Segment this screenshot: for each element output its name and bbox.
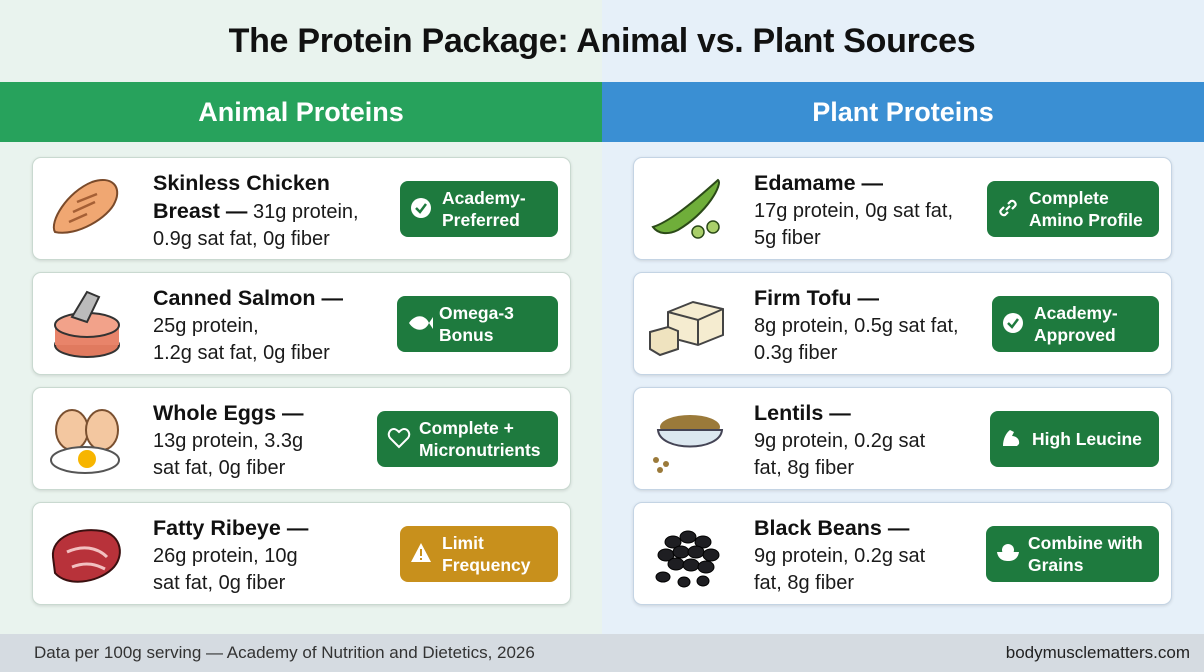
header: animal [0,82,602,142]
badge: Combine with [1028,533,1143,553]
badge [990,411,1159,467]
text: 1.2g sat fat, 0g fiber [153,342,330,364]
background right half [602,0,1204,634]
badge: Grains [1028,555,1083,575]
card: salmon [32,272,571,375]
text: 17g protein, 0g sat fat, [754,200,953,222]
text: 0.3g fiber [754,342,837,364]
text: 9g protein, 0.2g sat [754,545,925,567]
text: 25g protein, [153,315,259,337]
badge: Preferred [442,210,520,230]
badge [400,181,558,237]
footer [0,634,1204,672]
badge [377,411,558,467]
text: Black Beans — [754,516,909,540]
card: chicken [32,157,571,260]
badge: warning: Limit [442,533,484,553]
text [754,286,959,364]
text [153,286,343,364]
card: tofu [633,272,1172,375]
badge: Complete + [419,418,514,438]
text: Firm Tofu — [754,286,879,310]
text: 9g protein, 0.2g sat [754,430,925,452]
icon: beans [656,530,720,588]
badge: warning [400,526,558,582]
icon: bowl [653,415,724,473]
header: plant: Plant Proteins [812,97,994,127]
text: 26g protein, 10g [153,545,298,567]
text: sat fat, 0g fiber [153,457,285,479]
badge [397,296,558,352]
icon: tofu [649,301,724,356]
badge: Academy- [442,188,526,208]
badge: Micronutrients [419,440,541,460]
icon: steak [52,529,121,583]
text [754,171,953,249]
badge: Complete [1029,188,1109,208]
badge: Bonus [439,325,493,345]
text: Skinless Chicken Breast — 31g protein, 0.9g sat fat, 0g fiber [153,171,359,250]
icon: edamame [652,178,720,239]
footer source: Data per 100g serving — Academy of Nutrition and Dietetics, 2026 [34,643,535,662]
badge: High Leucine [1032,429,1142,449]
badge: Amino Profile [1029,210,1143,230]
text: Edamame — [754,171,883,195]
text: Whole Eggs — [153,401,304,425]
text: sat fat, 0g fiber [153,572,285,594]
header: animal: Animal Proteins [198,97,404,127]
text [754,516,926,594]
title: The Protein Package: Animal vs. Plant Sources [229,22,975,60]
text [153,516,308,594]
card: lentils [633,387,1172,490]
icon: can [54,290,120,358]
text: 13g protein, 3.3g [153,430,303,452]
header: plant [602,82,1204,142]
card: ribeye [32,502,571,605]
text: fat, 8g fiber [754,572,854,594]
card: eggs [32,387,571,490]
card: edamame [633,157,1172,260]
text: 5g fiber [754,227,821,249]
text: fat, 8g fiber [754,457,854,479]
text [754,401,926,479]
badge [992,296,1159,352]
badge: Omega-3 [439,303,514,323]
icon: eggs [50,409,120,474]
text: 8g protein, 0.5g sat fat, [754,315,959,337]
badge [987,181,1159,237]
icon: chicken [52,179,118,234]
badge: Academy- [1034,303,1118,323]
text: Lentils — [754,401,851,425]
badge: Approved [1034,325,1116,345]
footer site: bodymusclematters.com [1006,643,1190,662]
text [153,401,304,479]
card: black beans [633,502,1172,605]
text: Fatty Ribeye — [153,516,308,540]
badge [986,526,1159,582]
badge: warning: Frequency [442,555,530,575]
text: Canned Salmon — [153,286,343,310]
